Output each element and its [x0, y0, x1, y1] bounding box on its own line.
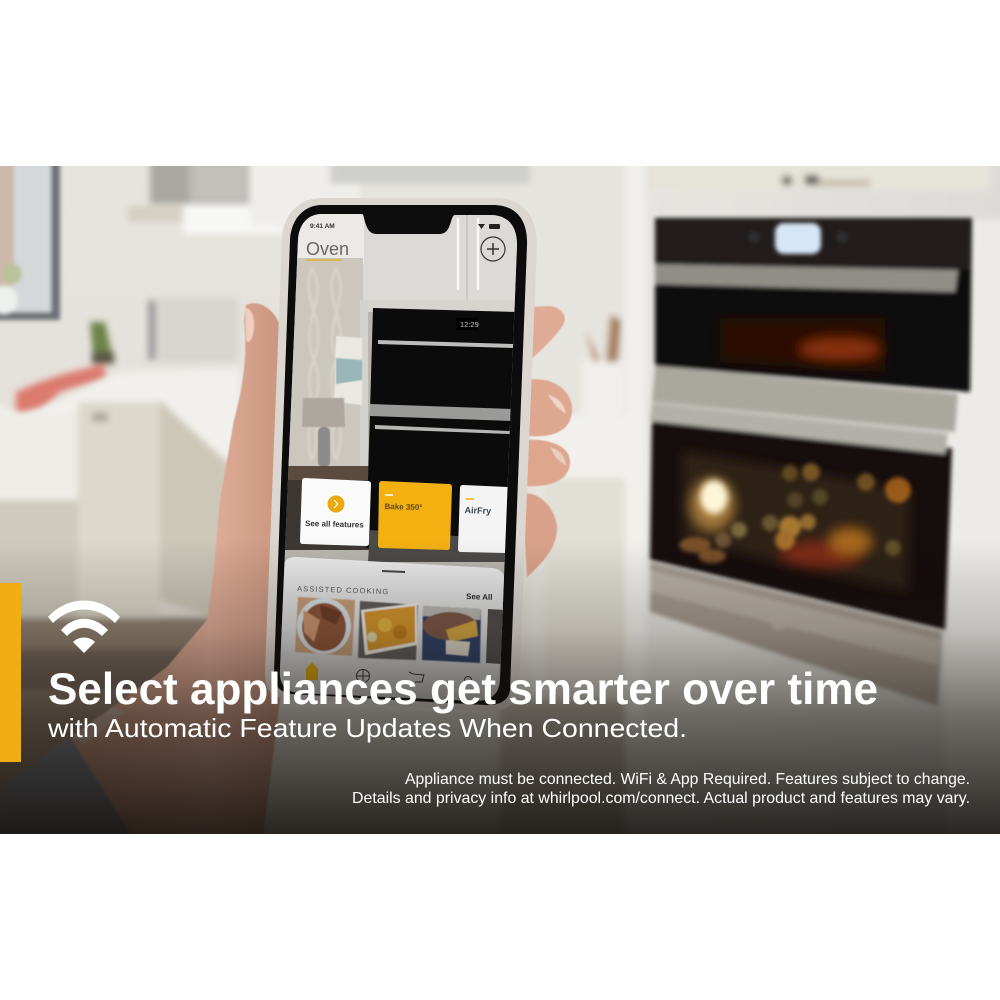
phone screen: [280, 214, 517, 701]
double wall oven: [650, 218, 972, 706]
fingers: [522, 306, 572, 577]
app oven: [366, 308, 518, 555]
heading: Select appliances get smarter over time: [48, 665, 878, 714]
counter top and lower cabinets: [0, 368, 240, 789]
disclaimer: Appliance must be connected. WiFi & App Required. Features subject to change.: [405, 771, 970, 788]
feature card: see all: [300, 478, 371, 546]
shirt rim: [72, 708, 123, 743]
counter items: [16, 298, 238, 412]
plus button: [481, 237, 505, 261]
hand and arm: [0, 303, 572, 844]
disclaimer: Details and privacy info at whirlpool.com/connect. Actual product and features may vary.: [352, 790, 970, 807]
bottom nav icons: [306, 662, 318, 680]
thumb nail: [245, 308, 254, 342]
status time: 9:41 AM: [310, 223, 335, 230]
icon: wifi: [48, 600, 120, 653]
yellow accent bar: [0, 583, 21, 762]
feature card: bake: [378, 481, 452, 550]
feature card: airfry: [458, 485, 508, 553]
oven display: [775, 223, 821, 254]
phone screen: 12:29: [460, 320, 479, 329]
assisted cooking sheet: See All: [466, 592, 493, 602]
lower oven glowing food: [682, 450, 910, 592]
subheading: with Automatic Feature Updates When Connected.: [47, 713, 687, 743]
window: [0, 156, 60, 320]
feature card: see all: See all features: [305, 519, 364, 530]
photo background: blurred kitchen: [0, 156, 1000, 844]
feature card: airfry: AirFry: [464, 505, 491, 516]
phone: [265, 198, 537, 711]
dark bottom gradient: [0, 540, 1000, 834]
background right of phone: [500, 166, 626, 798]
app wall and cabinet: [362, 214, 522, 300]
recipe image: casserole: [358, 601, 418, 660]
recipe image: cake: [422, 606, 481, 663]
arm: [70, 302, 281, 834]
status icons: [478, 224, 500, 229]
assisted cooking sheet: [278, 557, 505, 705]
oven clock: [456, 318, 478, 330]
phone case: [265, 198, 537, 711]
sleeve: [0, 738, 130, 834]
disclaimer: [352, 771, 970, 807]
lamp: [302, 398, 345, 467]
oven app title: Oven: [306, 239, 349, 259]
wallpaper pattern: [308, 268, 341, 460]
assisted cooking sheet: ASSISTED COOKING: [297, 584, 389, 596]
feature card: bake: Bake 350°: [384, 502, 423, 512]
artwork: [334, 336, 362, 405]
upper oven red glow: [720, 318, 885, 372]
recipe image: partial: [486, 609, 503, 664]
shelf and items: [126, 166, 531, 236]
recipe image: meat: [295, 597, 355, 656]
console table: [288, 466, 370, 480]
built-in cabinet: [625, 156, 1000, 844]
infographic canvas: [0, 166, 1000, 834]
